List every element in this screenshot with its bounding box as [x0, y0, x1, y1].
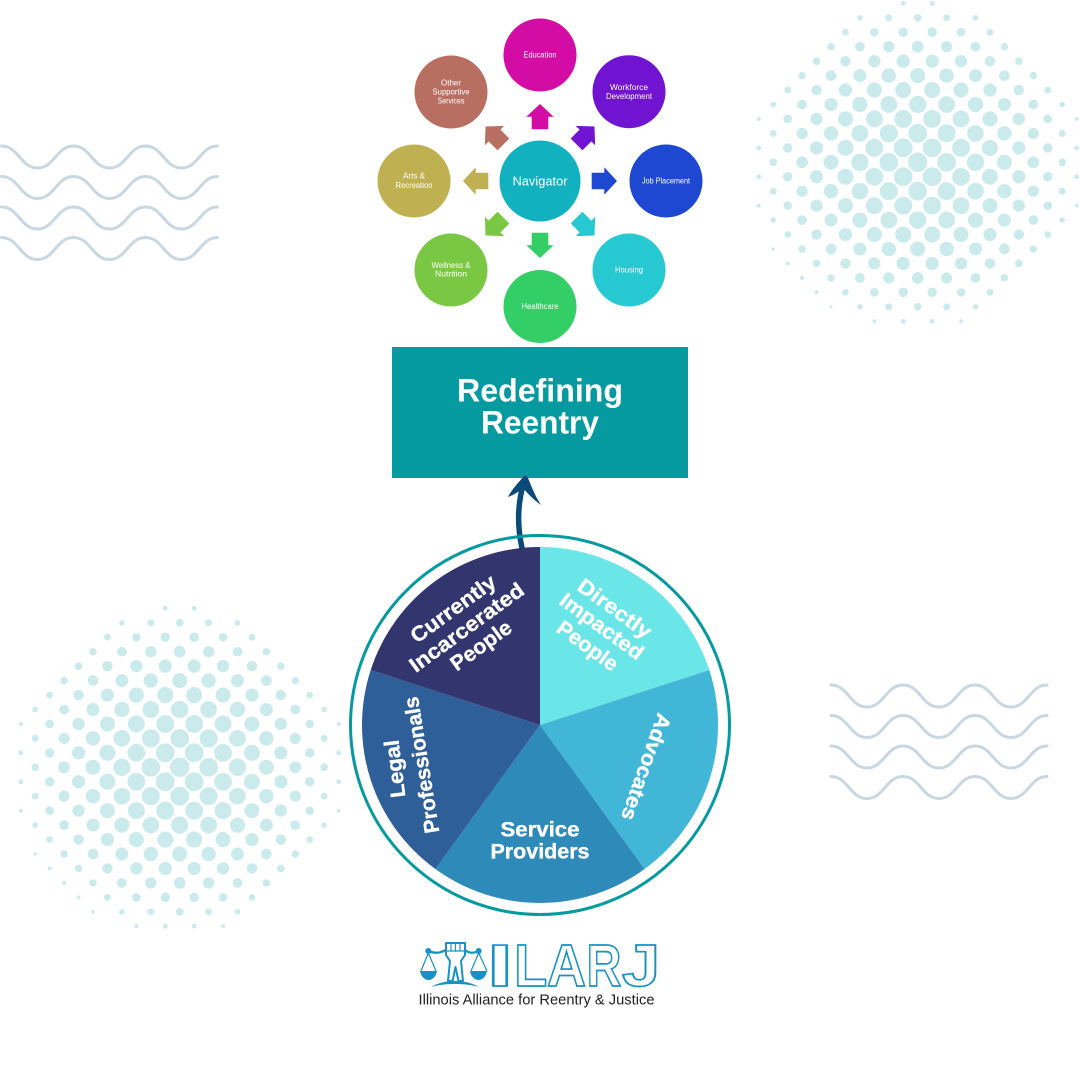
icon: scales of justice with raised fist [420, 943, 487, 987]
wave lines: bottom right [831, 685, 1047, 798]
navigator hub diagram [378, 18, 702, 343]
circle: wellness and nutrition: Nutrition [435, 270, 467, 279]
title box: Redefining Reentry: Reentry [481, 404, 599, 440]
slice: service providers: Providers [490, 840, 590, 863]
circle: workforce development: Workforce [610, 83, 649, 92]
circle: job placement: Job Placement [642, 177, 691, 186]
slice: directly impacted people [540, 547, 709, 725]
title box: Redefining Reentry [392, 347, 688, 478]
arrow: to other supportive services [476, 117, 513, 154]
slice: directly impacted people: People [552, 616, 622, 676]
slice: legal professionals: Legal [380, 739, 410, 799]
circle: healthcare [504, 270, 576, 343]
circle: other supportive services [414, 56, 488, 128]
arrow: to arts and recreation [463, 167, 488, 195]
logo wordmark: A [547, 933, 586, 999]
pie chart [362, 547, 718, 903]
arrow: to wellness and nutrition [476, 208, 513, 245]
circle: housing: Housing [615, 265, 643, 274]
slice: service providers [435, 725, 645, 903]
title box: Redefining Reentry: Redefining [457, 373, 623, 409]
arrow: to healthcare [526, 233, 554, 258]
circle: job placement [630, 144, 702, 218]
halftone dots: bottom left [21, 608, 339, 926]
logo caption: Illinois Alliance for Reentry & Justice [418, 992, 654, 1008]
circle: workforce development: Development [606, 92, 653, 101]
logo wordmark: L [514, 933, 547, 999]
slice: legal professionals: Professionals [400, 695, 444, 835]
circle: education: Education [524, 51, 556, 60]
arrow: to workforce development [567, 117, 604, 154]
circle: other supportive services: Other [441, 79, 461, 88]
circle: wellness and nutrition [414, 234, 488, 306]
slice: currently incarcerated people: People [446, 616, 516, 676]
circle: housing [592, 234, 666, 306]
circle: healthcare: Healthcare [522, 302, 559, 311]
logo wordmark: J [622, 933, 660, 999]
logo: ILARJ [418, 933, 660, 1008]
circle: other supportive services: Supportive [432, 88, 470, 97]
wave lines: top left [2, 146, 218, 260]
arrow: to job placement [592, 167, 617, 195]
circle: education [504, 18, 576, 92]
slice: service providers: Service [500, 819, 580, 842]
arrow: to education [526, 104, 554, 129]
logo wordmark: I [487, 933, 513, 999]
slice: currently incarcerated people: Currently [406, 570, 501, 648]
outer ring [350, 536, 730, 914]
halftone dots: top right [759, 3, 1077, 321]
slice: advocates: Advocates [616, 710, 675, 823]
arrow: to housing [567, 208, 604, 245]
slice: directly impacted people: Directly [573, 574, 656, 644]
slice: directly impacted people: Impacted [555, 589, 648, 665]
slice: advocates [540, 670, 718, 869]
slice: legal professionals [362, 670, 540, 869]
circle: other supportive services: Services [438, 96, 464, 105]
navigator circle: Navigator [512, 173, 568, 188]
circle: arts and recreation: Recreation [396, 181, 432, 190]
circle: workforce development [592, 55, 666, 128]
slice: currently incarcerated people: Incarcerated [405, 579, 529, 677]
logo wordmark: R [587, 933, 621, 999]
circle: wellness and nutrition: Wellness & [432, 261, 471, 270]
slice: currently incarcerated people [371, 547, 542, 725]
logo wordmark [487, 933, 660, 999]
circle: arts and recreation: Arts & [403, 172, 426, 181]
navigator circle [500, 140, 580, 222]
arrow: from pie to title box [508, 476, 541, 548]
circle: arts and recreation [378, 144, 450, 218]
